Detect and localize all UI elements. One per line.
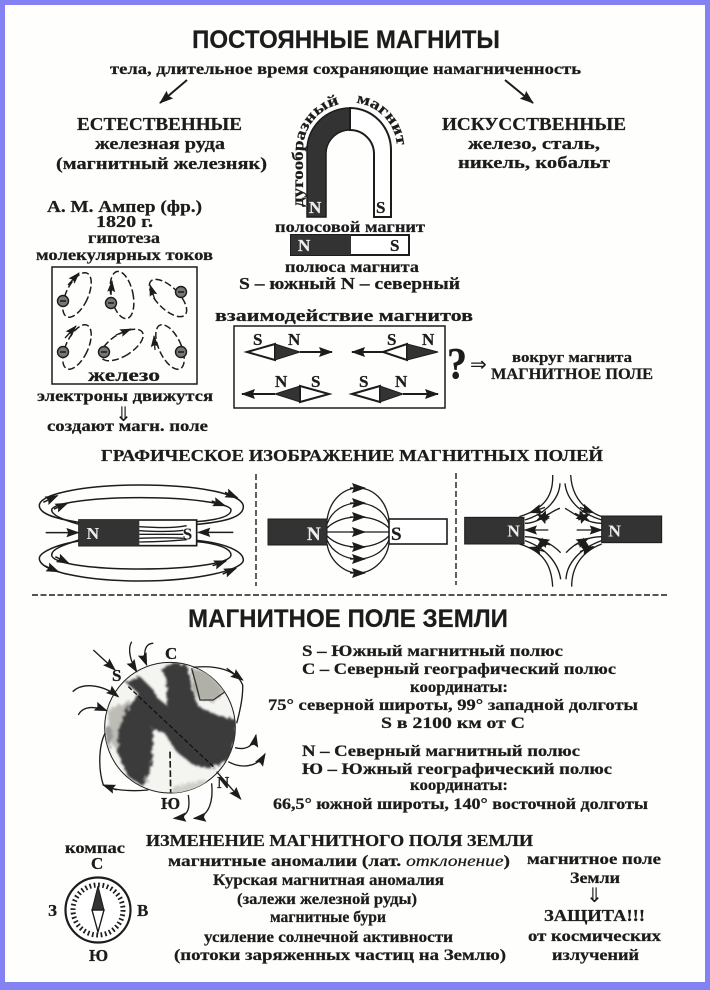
text block: artificial magnets (442, 114, 626, 172)
iron label: железо (88, 365, 160, 385)
magnetic field: МАГНИТНОЕ ПОЛЕ (491, 366, 653, 383)
compass: Ю (89, 946, 108, 965)
needle pair 3: S (311, 372, 320, 391)
anomalies: магнитные аномалии (лат. отклонение ) (168, 853, 510, 870)
globe pole labels (112, 644, 230, 813)
diagram: field between opposite poles: N (307, 524, 321, 545)
needle pair 3: N (275, 372, 288, 391)
arrow: to natural magnets (160, 80, 187, 103)
poles label: полюса магнита (285, 259, 419, 276)
horseshoe magnet: магнит (356, 96, 404, 145)
diagram: field of a single bar magnet: N (87, 524, 100, 543)
diagram: field between opposite poles (268, 488, 447, 573)
diagram: field between like poles (465, 475, 662, 587)
text block: magnet poles (239, 259, 461, 293)
text block: magnetic field around magnet (491, 350, 653, 383)
field line 1: магнитное поле (527, 851, 661, 868)
panel: molecular currents in iron (52, 267, 197, 385)
panel: interaction of magnets (234, 326, 445, 408)
needle pair 4: N (395, 372, 408, 391)
electrons move: электроны движутся (37, 388, 213, 405)
horseshoe magnet (291, 94, 404, 218)
heading: artificial: ИСКУССТВЕННЫЕ (442, 114, 626, 134)
needle pair 2: S (387, 330, 396, 349)
diagram: Earth globe (73, 642, 265, 818)
diagram: field of a single bar magnet: S (183, 524, 192, 543)
needle pair 1: N (288, 330, 301, 349)
definition text: тела, длительное время сохраняющие намагниченность (110, 61, 581, 78)
south geographic pole: Ю – Южный географический полюс (302, 761, 612, 778)
heading: graphic representation: ГРАФИЧЕСКОЕ ИЗОБРАЖЕНИЕ МАГНИТНЫХ ПОЛЕЙ (101, 446, 603, 465)
compass label: компас (65, 840, 125, 857)
north magnetic pole: N – Северный магнитный полюс (302, 743, 580, 760)
needle pair 2 (352, 330, 438, 360)
needle pair 4 (352, 372, 438, 402)
heading: interaction of magnets: взаимодействие магнитов (215, 306, 473, 325)
pole S: S (112, 666, 121, 685)
pole Ю: Ю (161, 794, 180, 813)
text block: electrons create field (37, 388, 213, 435)
radiation: излучений (552, 947, 639, 964)
text block: magnetic poles description (268, 643, 649, 813)
text block: changes of Earth's magnetic field (146, 831, 533, 964)
field line 2: Земли (570, 870, 620, 887)
electrons (58, 286, 186, 358)
hypothesis line 2: молекулярных токов (36, 247, 213, 264)
arrow: to artificial magnets (505, 80, 533, 103)
horseshoe magnet: N (309, 198, 322, 217)
horseshoe magnet: дугообразный (291, 94, 339, 207)
north geographic pole: С – Северный географический полюс (302, 661, 616, 678)
pole N: N (217, 773, 230, 792)
arrow down: ⇓ (586, 883, 603, 907)
bar magnet label: полосовой магнит (275, 219, 425, 236)
solar activity: усиление солнечной активности (204, 929, 453, 946)
Ampere name: А. М. Ампер (фр.) (47, 197, 202, 216)
iron deposits: (залежи железной руды) (237, 891, 417, 908)
compass (48, 840, 148, 965)
coordinates label 2: координаты: (410, 777, 508, 794)
heading: Earth magnetic field: МАГНИТНОЕ ПОЛЕ ЗЕМЛИ (188, 605, 508, 633)
horseshoe magnet: S (376, 198, 385, 217)
needle pair 3 (242, 372, 329, 402)
text block: protection (527, 851, 661, 964)
compass: З (48, 901, 57, 920)
bar magnet: S (390, 236, 399, 255)
north coordinates: 75° северной широты, 99° западной долготы (268, 697, 639, 714)
coordinates label: координаты: (410, 679, 508, 696)
diagram: field between like poles: N (507, 522, 520, 541)
south coordinates: 66,5° южной широты, 140° восточной долготы (273, 796, 649, 813)
pole C: С (165, 644, 177, 663)
bar magnet: N (298, 236, 311, 255)
particle streams: (потоки заряженных частиц на Землю) (174, 947, 506, 964)
around the magnet: вокруг магнита (512, 350, 633, 366)
needle pair 4: S (359, 372, 368, 391)
double arrow down: ⇓ (115, 402, 132, 426)
question mark: ? (447, 339, 467, 388)
create magnetic field: создают магн. поле (47, 418, 208, 435)
poles legend: S – южный N – северный (239, 274, 461, 293)
south magnetic pole: S – Южный магнитный полюс (302, 643, 563, 660)
protection: ЗАЩИТА!!! (544, 906, 645, 925)
orbit arrows (65, 273, 155, 350)
compass: В (137, 901, 148, 920)
hypothesis line 1: гипотеза (88, 230, 160, 247)
Kursk anomaly: Курская магнитная аномалия (213, 872, 444, 889)
compass: С (91, 854, 103, 873)
heading: changes: ИЗМЕНЕНИЕ МАГНИТНОГО ПОЛЯ ЗЕМЛИ (146, 831, 533, 850)
year: 1820 г. (96, 212, 153, 231)
natural examples line 1: железная руда (95, 134, 225, 153)
magnetic storms: магнитные бури (270, 909, 386, 926)
artificial examples line 1: железо, сталь, (468, 134, 600, 153)
diagram: field between opposite poles: S (391, 524, 402, 545)
needle pair 1 (247, 330, 332, 360)
dashed orbits (57, 269, 193, 373)
distance: S в 2100 км от С (381, 715, 525, 732)
bar magnet (275, 219, 425, 255)
text block: Ampere (36, 197, 213, 264)
arrow: implies: ⇒ (470, 352, 487, 376)
heading: natural: ЕСТЕСТВЕННЫЕ (77, 114, 242, 134)
diagram: field between like poles: N (608, 522, 621, 541)
artificial examples line 2: никель, кобальт (458, 153, 610, 172)
natural examples line 2: (магнитный железняк) (56, 154, 267, 173)
needle pair 2: N (422, 330, 435, 349)
needle pair 1: S (253, 330, 262, 349)
from cosmic: от космических (528, 928, 661, 945)
diagram: field of a single bar magnet (39, 485, 243, 581)
text block: natural magnets (56, 114, 267, 173)
field lines (73, 642, 265, 818)
title: ПОСТОЯННЫЕ МАГНИТЫ (192, 26, 500, 54)
